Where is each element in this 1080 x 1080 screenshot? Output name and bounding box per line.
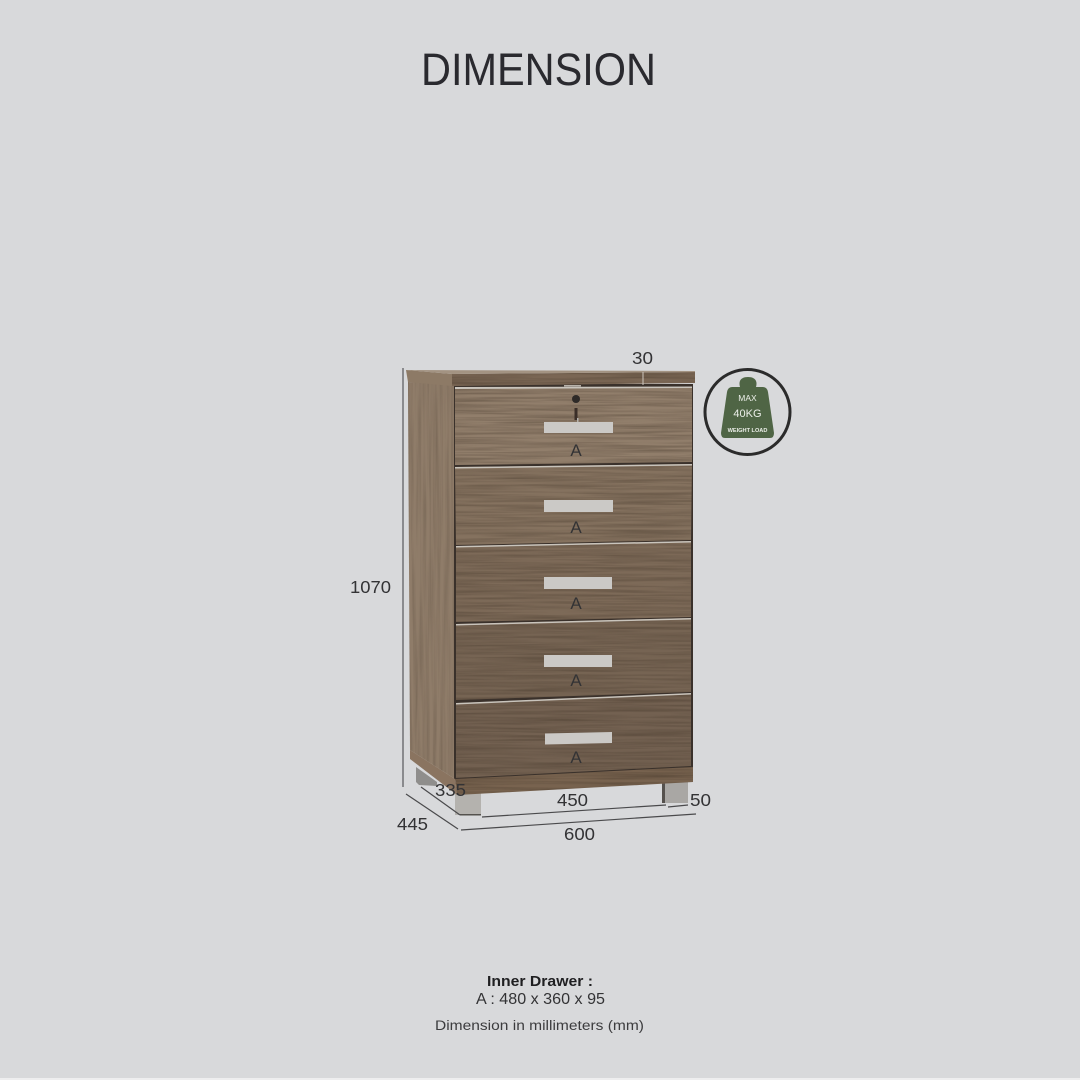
- weight load badge: WEIGHT LOAD: [728, 428, 767, 434]
- dimension labels: 335: [435, 780, 466, 800]
- drawer label: A: [570, 671, 582, 690]
- front left leg: [455, 792, 481, 816]
- handle: [544, 500, 613, 512]
- handle: [544, 422, 613, 433]
- drawer label: A: [570, 748, 582, 767]
- drawer 2: [455, 464, 692, 545]
- drawer label: A: [570, 441, 582, 460]
- drawer label: A: [570, 518, 582, 537]
- inner drawer note: A : 480 x 360 x 95: [476, 991, 605, 1008]
- drawer 5: [456, 693, 691, 778]
- dimension labels: 1070: [350, 577, 391, 597]
- weight load badge: [705, 370, 790, 454]
- drawer 1: [455, 386, 692, 465]
- key lock: [572, 395, 580, 428]
- cabinet dark back: [454, 384, 693, 780]
- dimension labels: 445: [397, 814, 428, 834]
- handle: [544, 577, 612, 589]
- inner drawer note: Inner Drawer :: [487, 973, 593, 990]
- icon: weight: [721, 377, 774, 438]
- dimension labels: 50: [690, 790, 711, 810]
- base plinth: [410, 750, 693, 795]
- cabinet side panel: [408, 382, 455, 779]
- inner drawer note: Dimension in millimeters (mm): [435, 1018, 644, 1033]
- drawer 4: [456, 618, 691, 700]
- drawer 3: [456, 541, 691, 622]
- chest of drawers: [406, 370, 695, 816]
- drawer label: A: [570, 594, 582, 613]
- title: DIMENSION: [421, 44, 656, 95]
- inner drawer note: [435, 973, 644, 1033]
- weight load badge: MAX: [738, 393, 757, 403]
- dimension labels: 30: [632, 348, 653, 368]
- dimension lines: [403, 368, 696, 830]
- weight load badge: 40KG: [733, 408, 762, 420]
- handle: [544, 655, 612, 667]
- top panel: [406, 370, 695, 386]
- right leg: [662, 780, 688, 803]
- dimension labels: 600: [564, 824, 595, 844]
- dimension labels: 450: [557, 790, 588, 810]
- handle: [545, 732, 612, 744]
- back leg: [416, 767, 437, 786]
- dimension labels: [350, 348, 711, 844]
